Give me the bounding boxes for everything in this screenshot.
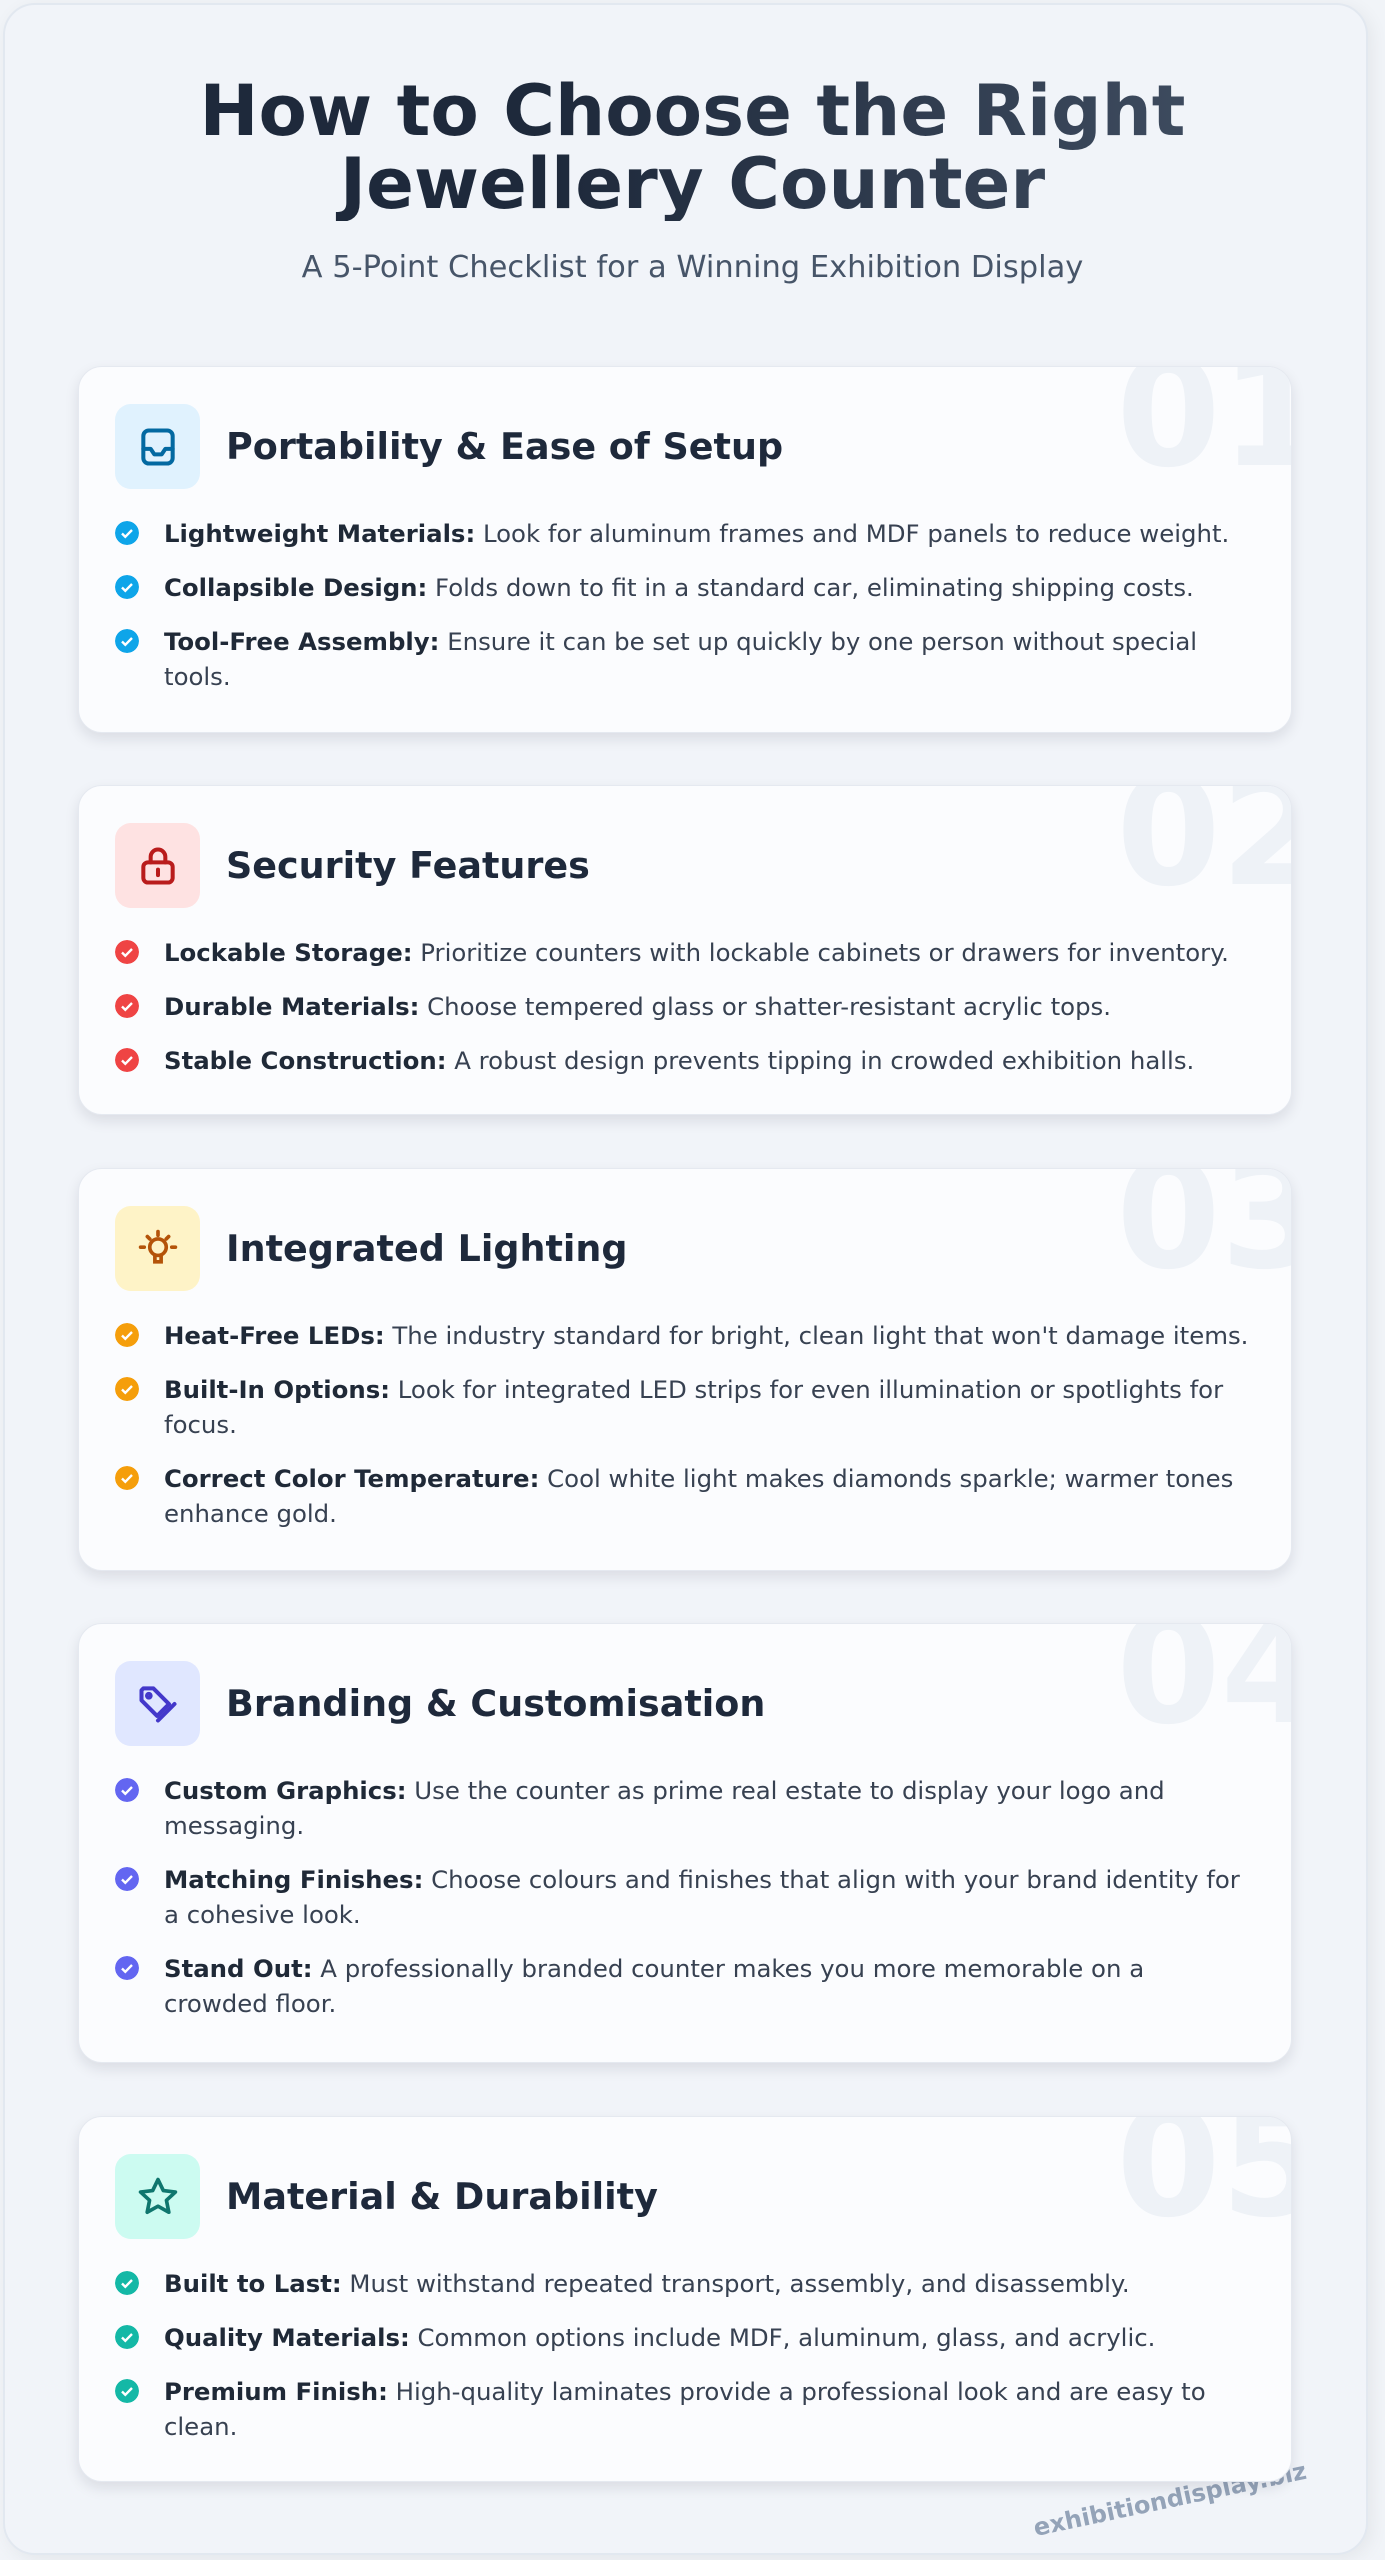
list: branding: a cohesive look.	[164, 1900, 361, 1929]
heading: lighting	[115, 1206, 628, 1291]
title: How to Choose the Right	[200, 70, 1185, 152]
list: portability	[115, 519, 1229, 691]
list: branding: Custom Graphics: Use the counter as prime real estate to display your logo and messaging.	[164, 1776, 1165, 1840]
heading: material: Material & Durability	[226, 2175, 658, 2218]
list: lighting: Heat-Free LEDs: The industry standard for bright, clean light that won't damage items.	[164, 1321, 1248, 1350]
list: portability: Lightweight Materials: Look for aluminum frames and MDF panels to reduce weight.	[164, 519, 1229, 548]
list: portability: Tool-Free Assembly: Ensure it can be set up quickly by one person without special tools.	[164, 627, 1197, 691]
list: security: Stable Construction: A robust design prevents tipping in crowded exhibition halls.	[164, 1046, 1194, 1075]
heading: material	[115, 2154, 658, 2239]
list: lighting: Built-In Options: Look for integrated LED strips for even illumination or spotlights for focus.	[164, 1375, 1223, 1439]
list: material: Built to Last: Must withstand repeated transport, assembly, and disassembly.	[164, 2269, 1130, 2298]
heading: portability	[115, 404, 783, 489]
list: lighting	[115, 1321, 1248, 1528]
title	[0, 75, 1385, 221]
list: security: Durable Materials: Choose tempered glass or shatter-resistant acrylic tops.	[164, 992, 1111, 1021]
title: Jewellery Counter	[340, 143, 1045, 225]
heading: security: Security Features	[226, 844, 590, 887]
heading: lighting: Integrated Lighting	[226, 1227, 628, 1270]
list: portability: Collapsible Design: Folds down to fit in a standard car, eliminating shipping costs.	[164, 573, 1194, 602]
panel: portability	[78, 366, 1292, 733]
list: lighting: Correct Color Temperature: Cool white light makes diamonds sparkle; warmer tones enhance gold.	[164, 1464, 1233, 1528]
list: branding: Stand Out: A professionally branded counter makes you more memorable on a	[164, 1954, 1144, 1983]
heading: portability: Portability & Ease of Setup	[226, 425, 783, 468]
panel: lighting	[78, 1168, 1292, 1571]
panel: branding	[78, 1623, 1292, 2063]
list: branding	[115, 1776, 1240, 2018]
list: material: Premium Finish: High-quality laminates provide a professional look and are easy to clean.	[164, 2377, 1206, 2441]
list: security	[115, 938, 1229, 1075]
list: branding: Matching Finishes: Choose colours and finishes that align with your brand identity for	[164, 1865, 1240, 1894]
heading: branding: Branding & Customisation	[226, 1682, 765, 1725]
heading: branding	[115, 1661, 765, 1746]
heading: security	[115, 823, 590, 908]
list: branding: crowded floor.	[164, 1989, 336, 2018]
subtitle: A 5-Point Checklist for a Winning Exhibition Display	[302, 250, 1083, 285]
list: material	[115, 2269, 1206, 2441]
panel: security	[78, 785, 1292, 1115]
watermark: exhibitiondisplay.biz	[1031, 2457, 1309, 2542]
list: security: Lockable Storage: Prioritize counters with lockable cabinets or drawers for inventory.	[164, 938, 1229, 967]
panel: material	[78, 2116, 1292, 2482]
list: material: Quality Materials: Common options include MDF, aluminum, glass, and acrylic.	[164, 2323, 1155, 2352]
